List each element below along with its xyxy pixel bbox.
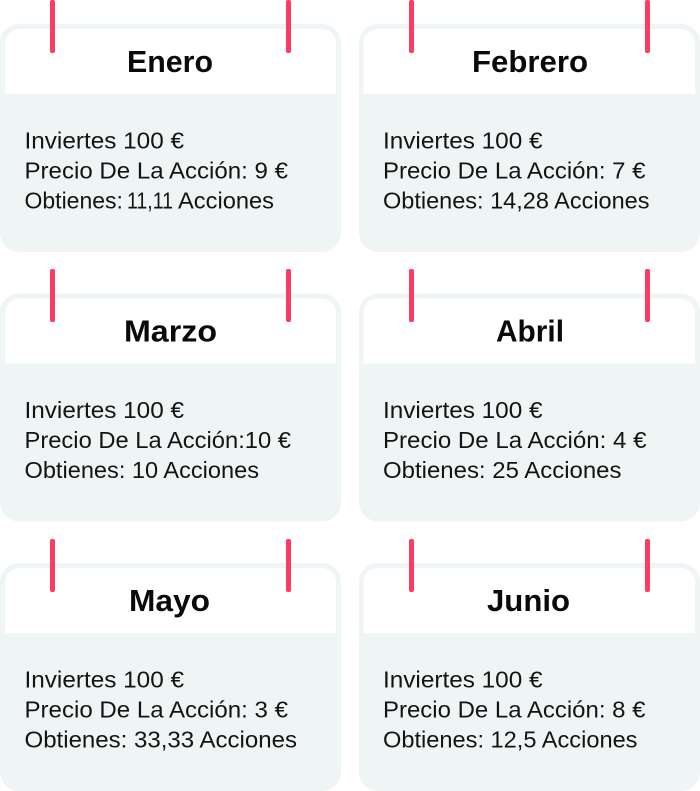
calendar ring right [645, 0, 650, 53]
text block: Mayo details: Precio De La Acción: 3 € [24, 696, 288, 722]
heading: Febrero: Febrero [472, 44, 588, 79]
text block: Marzo details: Precio De La Acción:10 € [24, 427, 291, 453]
text block: Enero details: Inviertes 100 € [24, 128, 184, 154]
panel: Junio [359, 539, 700, 791]
card header [5, 298, 336, 364]
text block: Febrero details [383, 128, 650, 214]
card background [0, 24, 341, 252]
calendar ring left [409, 0, 414, 53]
panel: Mayo [0, 539, 341, 791]
text block: Enero details: 11,11 [127, 188, 173, 214]
text block: Junio details: Precio De La Acción: 8 € [383, 696, 646, 722]
calendar ring right [286, 539, 291, 592]
panel: Enero [0, 0, 341, 252]
card background [0, 294, 341, 522]
text block: Junio details [383, 666, 646, 752]
calendar ring right [645, 539, 650, 592]
calendar ring left [409, 269, 414, 322]
text block: Junio details: Inviertes 100 € [383, 666, 543, 692]
text block: Mayo details: Obtienes: 33,33 Acciones [24, 726, 297, 752]
calendar ring left [50, 269, 55, 322]
calendar ring right [645, 269, 650, 322]
calendar ring left [50, 539, 55, 592]
text block: Abril details: Inviertes 100 € [383, 397, 543, 423]
card header [5, 29, 336, 94]
calendar ring right [286, 269, 291, 322]
card header [5, 568, 336, 633]
panel: Febrero [359, 0, 700, 252]
card header [364, 29, 695, 94]
card header [364, 568, 695, 633]
text block: Marzo details: Inviertes 100 € [24, 397, 184, 423]
text block: Mayo details: Inviertes 100 € [24, 666, 184, 692]
heading: Junio: Junio [487, 583, 570, 618]
text block: Marzo details [24, 397, 291, 483]
card header [364, 298, 695, 364]
text block: Enero details [24, 128, 288, 214]
text block: Abril details: Obtienes: 25 Acciones [383, 457, 622, 483]
calendar ring right [286, 0, 291, 53]
heading: Marzo: Marzo [124, 314, 217, 348]
heading: Enero: Enero [127, 44, 213, 79]
text block: Febrero details: Precio De La Acción: 7 € [383, 158, 646, 184]
text block: Enero details: Obtienes: [24, 188, 123, 214]
text block: Marzo details: Obtienes: 10 Acciones [24, 457, 259, 483]
text block: Febrero details: Obtienes: 14,28 Acciones [383, 188, 650, 214]
panel: Marzo [0, 269, 341, 522]
panel: Abril [359, 269, 700, 522]
text block: Abril details: Precio De La Acción: 4 € [383, 427, 647, 453]
text block: Junio details: Obtienes: 12,5 Acciones [383, 726, 638, 752]
card background [0, 563, 341, 791]
text block: Abril details [383, 397, 647, 483]
heading: Mayo: Mayo [129, 583, 210, 618]
heading: Abril: Abril [496, 314, 564, 348]
text block: Enero details: Acciones [178, 188, 274, 214]
calendar ring left [50, 0, 55, 53]
text block: Enero details: Precio De La Acción: 9 € [24, 158, 288, 184]
card background [359, 24, 700, 252]
text block: Mayo details [24, 666, 297, 752]
card background [359, 294, 700, 522]
card background [359, 563, 700, 791]
text block: Febrero details: Inviertes 100 € [383, 128, 543, 154]
calendar ring left [409, 539, 414, 592]
